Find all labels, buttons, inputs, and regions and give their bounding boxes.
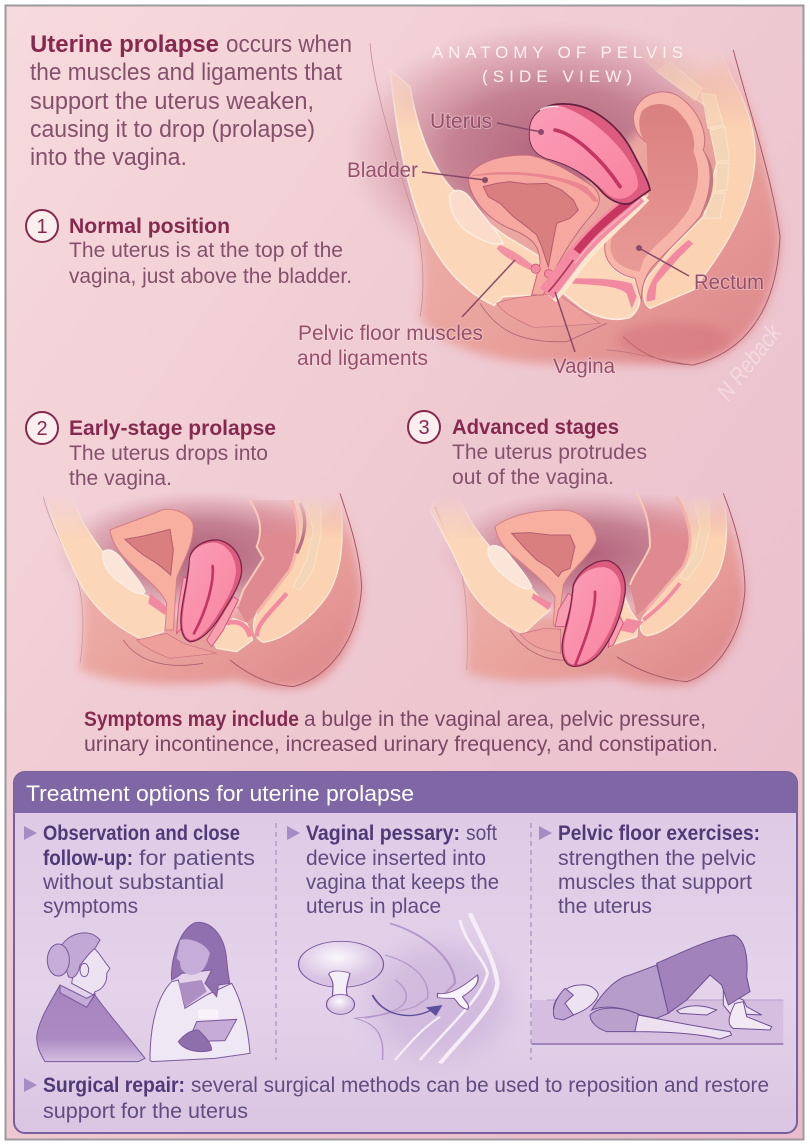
- step 3: advanced stages: The uterus protrudes: [452, 440, 647, 464]
- option: observation and close follow-up: without substantial: [42, 871, 224, 894]
- number badge 3: [408, 411, 440, 443]
- step 2: early-stage prolapse: [26, 412, 276, 490]
- rectum: [605, 92, 710, 302]
- option: pelvic floor exercises: [539, 822, 760, 918]
- vulva: [480, 303, 607, 342]
- label: uterus: [430, 110, 544, 135]
- front band: [47, 497, 167, 639]
- anatomy labels and leader lines: [297, 110, 764, 378]
- pessary in place: [438, 975, 478, 1009]
- panel heading bar: Treatment options for uterine prolapse: [26, 781, 414, 806]
- intro text: causing it to drop (prolapse): [30, 116, 315, 143]
- option: vaginal pessary: uterus in place: [306, 895, 441, 918]
- illustration: early-stage prolapse: [43, 490, 362, 688]
- uterus: [181, 540, 242, 642]
- uterus: [562, 561, 625, 666]
- step 1: normal position: vagina, just above the bladder.: [69, 264, 352, 288]
- step 2: early-stage prolapse: the vagina.: [69, 466, 172, 490]
- illustration: pessary: [298, 913, 498, 1063]
- bladder: [468, 155, 599, 295]
- option: observation and close follow-up: Observation and close: [43, 822, 240, 845]
- symptoms text: urinary incontinence, increased urinary frequency, and constipation.: [84, 732, 718, 756]
- body: [462, 493, 745, 685]
- illustration: anatomy of pelvis side view: [343, 20, 780, 365]
- pubic bone: [103, 550, 145, 594]
- front peach band: [390, 70, 540, 305]
- vagina: [547, 193, 642, 295]
- label: pelvic floor muscles: Pelvic floor muscles: [298, 322, 483, 345]
- illustration: patient and doctor: [37, 922, 250, 1062]
- option: vaginal pessary: soft: [466, 822, 497, 845]
- option: surgical repair: [24, 1074, 769, 1123]
- option: pelvic floor exercises: the uterus: [558, 895, 652, 918]
- label: vagina: [553, 292, 615, 378]
- vaginal folds: [177, 577, 190, 633]
- label: rectum: Rectum: [694, 271, 764, 294]
- rectum: [630, 493, 690, 615]
- option: observation and close follow-up: [24, 822, 255, 918]
- panel: treatment options: [14, 772, 797, 1133]
- back peach band: [642, 58, 756, 309]
- perineal body: [213, 618, 253, 652]
- option: pelvic floor exercises: strengthen the pelvic: [558, 847, 756, 870]
- option: observation and close follow-up: follow-up:: [43, 847, 133, 870]
- title text: anatomy of pelvis: [432, 43, 683, 86]
- vulva: [123, 640, 203, 665]
- option: pelvic floor exercises: Pelvic floor exercises:: [558, 822, 760, 845]
- doctor: [150, 922, 250, 1062]
- body flesh: [417, 50, 780, 365]
- mat: [532, 1000, 783, 1044]
- vertebrae: [657, 62, 729, 218]
- step 2: early-stage prolapse: Early-stage prolapse: [69, 416, 276, 440]
- illustration: advanced stage prolapse: [430, 490, 745, 685]
- option: vaginal pessary: Vaginal pessary:: [306, 822, 460, 845]
- vulva: [510, 630, 570, 660]
- step 1: normal position: [26, 210, 352, 288]
- illustration: bridge exercise: [532, 935, 783, 1044]
- panel background: [14, 772, 797, 1133]
- number badge 3: 3: [418, 417, 430, 439]
- label: uterus: Uterus: [430, 110, 492, 133]
- artist signature: N Reback: [711, 318, 788, 406]
- option: vaginal pessary: [287, 822, 499, 918]
- number badge 2: [26, 412, 58, 444]
- label: rectum: [636, 245, 764, 294]
- vaginal folds: [555, 593, 573, 627]
- option: surgical repair: Surgical repair:: [43, 1074, 185, 1097]
- perineal body: [563, 190, 653, 319]
- symptoms text: a bulge in the vaginal area, pelvic pressure,: [304, 707, 706, 731]
- title text: anatomy of pelvis: ANATOMY OF PELVIS: [432, 43, 683, 62]
- title text: anatomy of pelvis: (SIDE VIEW): [482, 67, 632, 86]
- intro text: support the uterus weaken,: [30, 88, 314, 115]
- intro text: [30, 31, 352, 171]
- bladder: [110, 509, 193, 630]
- label: bladder: [347, 159, 488, 183]
- step 3: advanced stages: out of the vagina.: [452, 465, 614, 489]
- step 2: early-stage prolapse: The uterus drops into: [69, 441, 268, 465]
- panel heading bar: [14, 772, 797, 813]
- muscles: [497, 240, 693, 308]
- option: pelvic floor exercises: muscles that support: [558, 871, 752, 894]
- arrow: [372, 995, 442, 1016]
- perineal body: [610, 593, 638, 647]
- front wall contour: [370, 43, 423, 317]
- step 1: normal position: The uterus is at the top of the: [69, 238, 343, 262]
- rectum: [237, 500, 298, 623]
- option: vaginal pessary: device inserted into: [306, 847, 486, 870]
- patient: [37, 933, 145, 1062]
- label: bladder: Bladder: [347, 159, 418, 182]
- number badge 1: 1: [36, 216, 48, 238]
- step 1: normal position: Normal position: [69, 214, 230, 238]
- device: pessary: [298, 941, 384, 1014]
- back band: [640, 493, 727, 636]
- symptoms text: [84, 707, 718, 756]
- option: vaginal pessary: vagina that keeps the: [306, 871, 499, 894]
- label: vagina: Vagina: [553, 355, 615, 378]
- label: pelvic floor muscles: [297, 260, 515, 370]
- front band: [430, 493, 550, 634]
- pubic bone: [450, 190, 503, 244]
- option: surgical repair: several surgical methods can be used to reposition and restore: [191, 1074, 769, 1097]
- pelvic anatomy lines: [355, 913, 498, 1063]
- option: observation and close follow-up: symptoms: [43, 895, 138, 918]
- cavity shading: [343, 20, 770, 287]
- pubic bone: [488, 546, 532, 589]
- bladder: [495, 510, 597, 625]
- symptoms text: Symptoms may include: [84, 707, 299, 731]
- label: pelvic floor muscles: and ligaments: [297, 347, 428, 370]
- step 3: advanced stages: [408, 411, 647, 489]
- step 3: advanced stages: Advanced stages: [452, 415, 619, 439]
- person: [553, 935, 772, 1039]
- number badge 1: [26, 210, 58, 242]
- number badge 2: 2: [36, 418, 48, 440]
- option: observation and close follow-up: for patients: [139, 847, 255, 870]
- option: surgical repair: support for the uterus: [43, 1100, 248, 1123]
- intro text: into the vagina.: [30, 144, 187, 171]
- intro text: the muscles and ligaments that: [30, 59, 342, 86]
- intro text: Uterine prolapse: [30, 31, 219, 58]
- intro text: occurs when: [226, 31, 352, 58]
- body: [80, 493, 362, 688]
- uterus: [530, 104, 650, 204]
- back band: [253, 497, 342, 642]
